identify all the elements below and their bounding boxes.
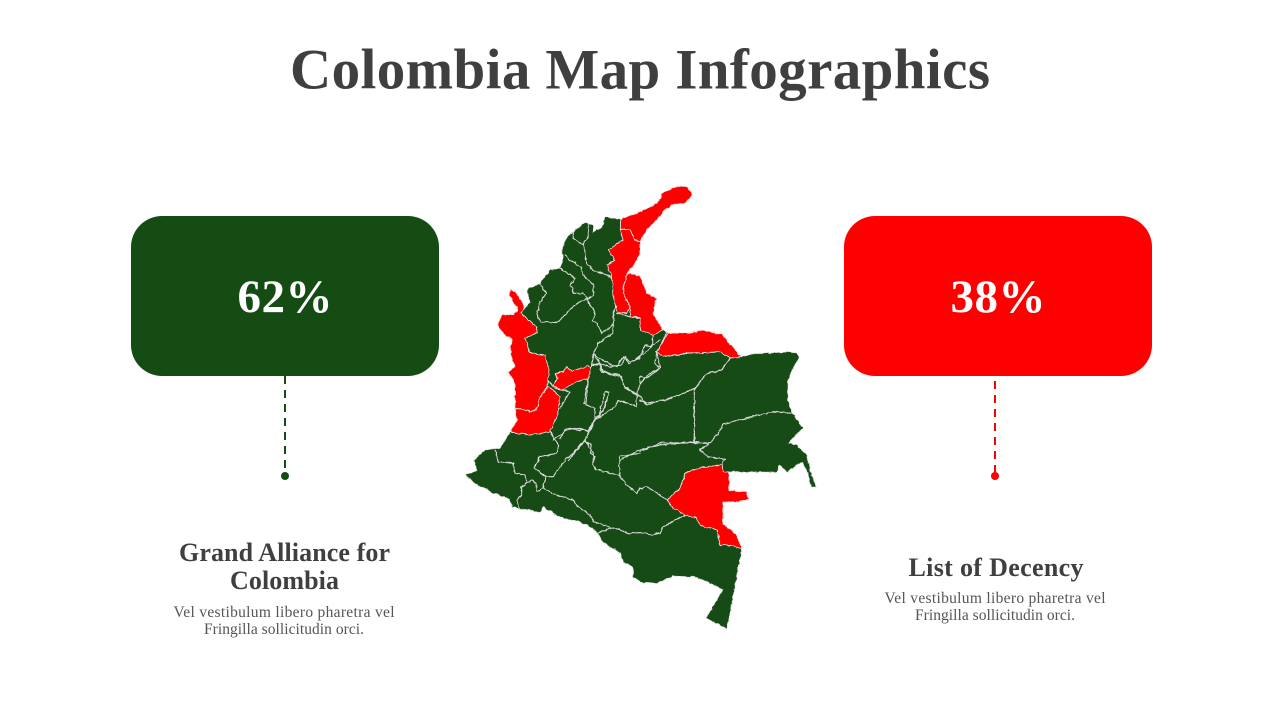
text block: List of Decency: Vel vestibulum libero pharetra vel [884,590,1106,607]
map: red Cesar [607,229,640,313]
map: Colombia departments [465,186,816,629]
map: central department borders [560,340,700,460]
map: southwest department borders [495,400,640,533]
title: Colombia Map Infographics [290,38,990,102]
text block: List of Decency [884,553,1106,624]
map: northwest department borders [537,225,640,408]
connector: left dashed line with dot [281,376,289,480]
text block: Grand Alliance for Colombia: Vel vestibulum libero pharetra vel [174,604,394,621]
text block: List of Decency: Fringilla sollicitudin orci. [915,607,1075,624]
panel: right stat card 38%: 38% [950,271,1046,323]
map: red Arauca [657,330,741,358]
map: red Guainia [667,464,749,549]
map: green country silhouette [465,186,816,629]
map: southeast department borders [640,400,792,535]
map: red Norte de Santander [623,273,663,335]
text block: Grand Alliance for Colombia: Colombia [230,566,339,595]
text block: List of Decency: List of Decency [908,553,1084,582]
connector: right dashed line with dot [991,381,999,480]
map: red Choco [497,290,549,412]
text block: Grand Alliance for Colombia: Grand Alliance for [179,538,390,567]
text block: Grand Alliance for Colombia: Fringilla sollicitudin orci. [204,621,364,638]
map: red Cauca [510,387,560,435]
map: northeast department borders [640,332,730,405]
map: red La Guajira and Magdalena [620,186,693,242]
panel: left stat card 62%: 62% [238,271,332,323]
panel: left stat card 62% [131,216,439,376]
text block: Grand Alliance for Colombia [174,538,394,638]
panel: right stat card 38% [844,216,1152,376]
map: red Caldas [553,366,591,390]
